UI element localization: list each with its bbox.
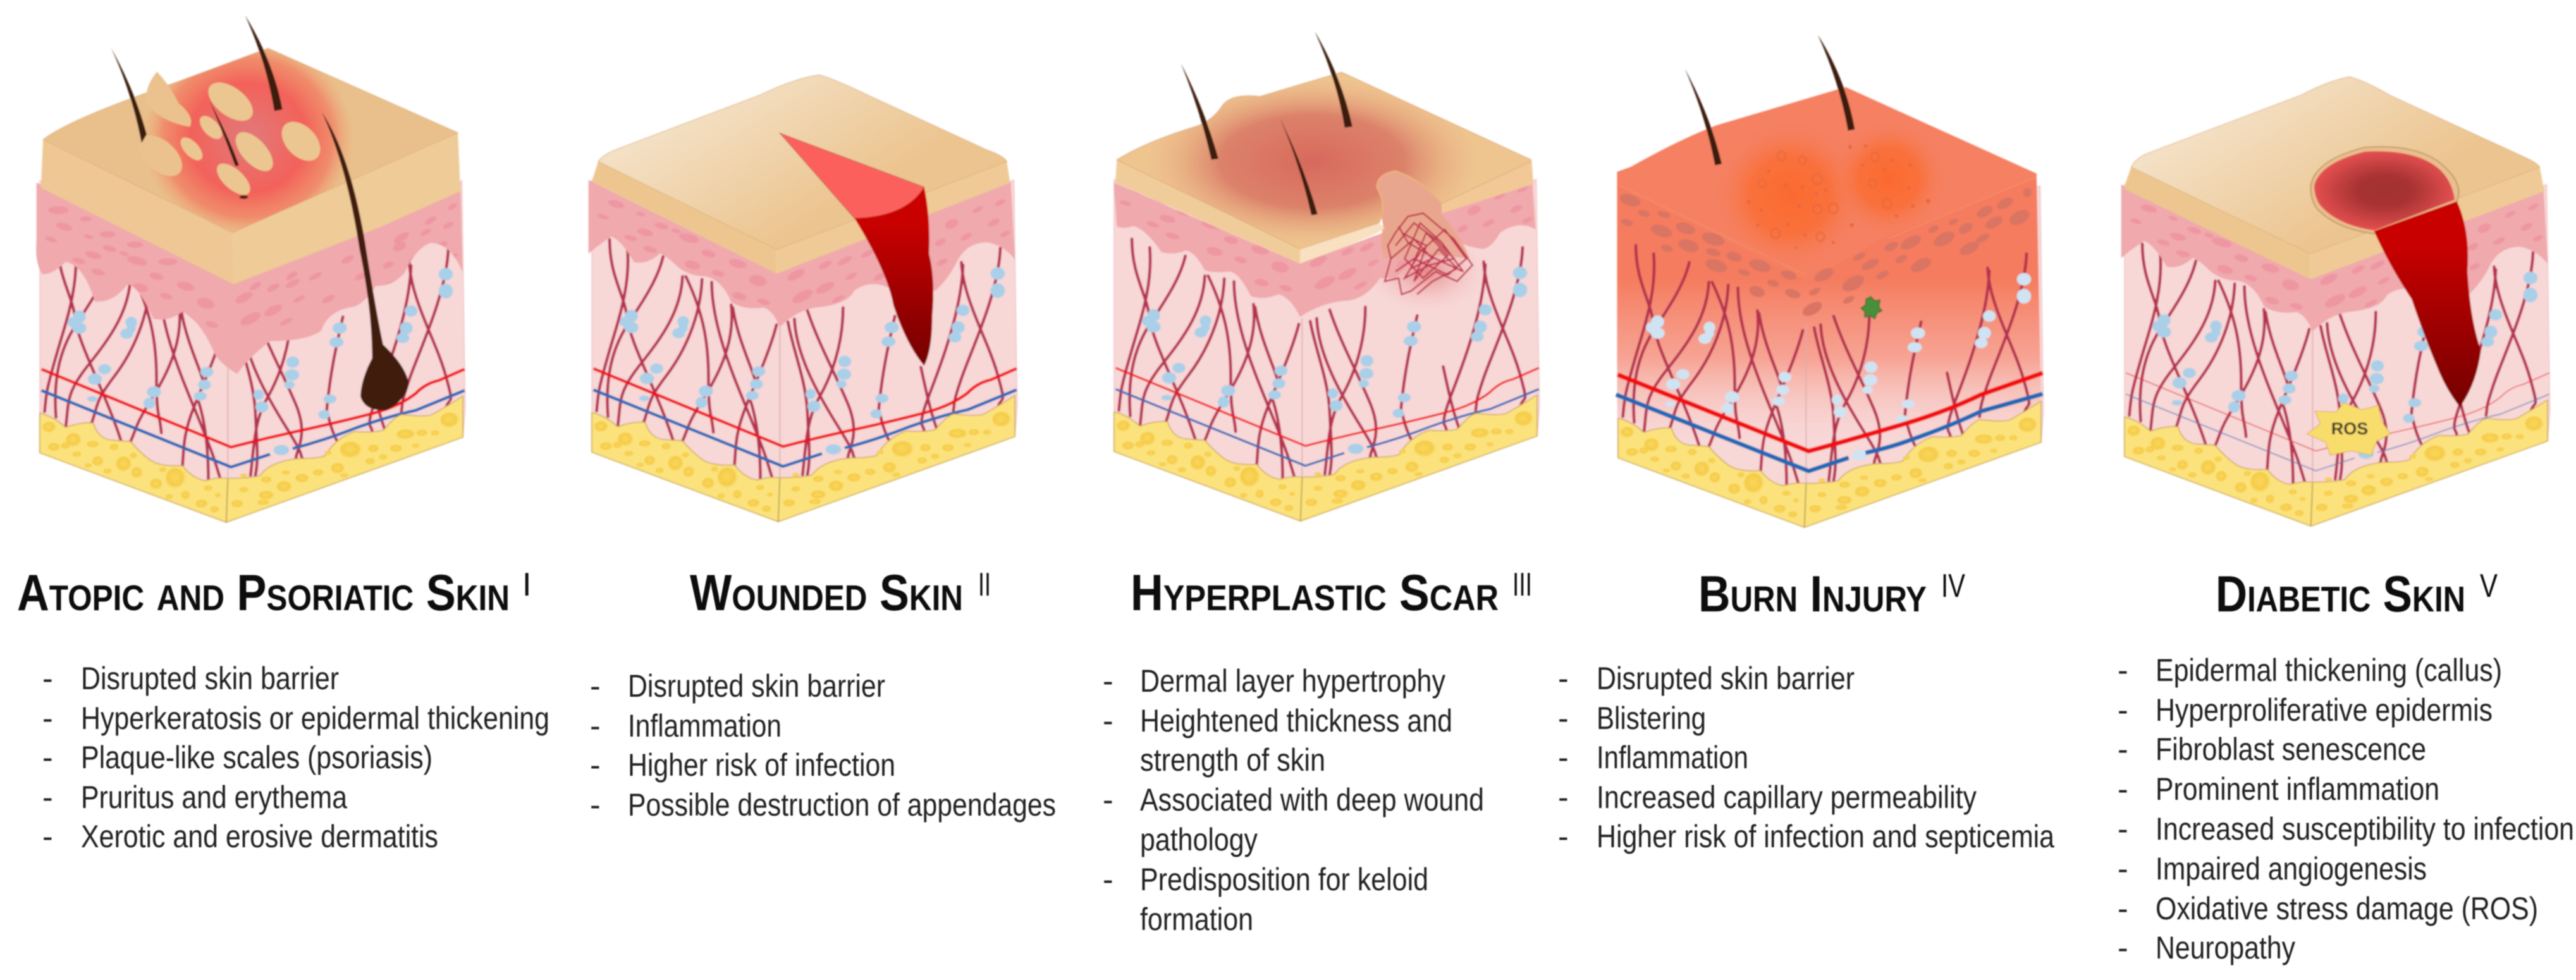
bullet list: wounded: - <box>590 708 601 744</box>
bullet list: atopic: - <box>42 701 53 736</box>
bullet list: diabetic: Hyperproliferative epidermis <box>2156 692 2493 728</box>
bullet list: diabetic: - <box>2118 930 2128 965</box>
bullet list: scar: Dermal layer hypertrophy <box>1140 663 1445 699</box>
bullet list: diabetic: Prominent inflammation <box>2156 771 2439 807</box>
panel: hyperplastic scar <box>1103 32 1540 937</box>
bullet list: atopic: - <box>42 740 53 775</box>
bullet list: wounded: - <box>590 668 601 704</box>
label: ROS: ROS <box>2331 419 2368 438</box>
bullet list: diabetic: Fibroblast senescence <box>2156 732 2426 767</box>
heading: hyperplastic scar: Hyperplastic Scar <box>1131 565 1499 622</box>
bullet list: wounded: - <box>590 787 601 823</box>
bullet list: diabetic: Neuropathy <box>2156 930 2295 965</box>
illustration: wounded skin cube <box>589 75 1017 522</box>
bullet list: diabetic: - <box>2118 692 2128 728</box>
panel: burn injury <box>1558 35 2054 854</box>
heading: hyperplastic scar: III <box>1512 567 1532 603</box>
bullet list: diabetic: - <box>2118 732 2128 767</box>
bullet list: scar <box>1103 663 1484 937</box>
bullet list: burn: Inflammation <box>1597 740 1748 775</box>
dermis base <box>1618 186 2044 527</box>
heading: diabetic skin: V <box>2480 568 2498 604</box>
bullet list: wounded <box>590 668 1056 823</box>
heading: burn injury: Burn Injury <box>1698 566 1927 623</box>
bullet list: atopic: Pruritus and erythema <box>81 780 347 815</box>
heading: diabetic skin: Diabetic Skin <box>2216 566 2465 623</box>
bullet list: diabetic: - <box>2118 771 2128 807</box>
epidermis, plaques and hair <box>36 16 463 410</box>
bullet list: burn: - <box>1558 701 1569 736</box>
bullet list: atopic: - <box>42 819 53 854</box>
heading: wounded skin: Wounded Skin <box>690 565 963 622</box>
illustration: diabetic skin cube <box>2121 77 2550 526</box>
bullet list: burn: Higher risk of infection and septicemia <box>1597 819 2054 854</box>
bullet list: diabetic <box>2118 652 2574 965</box>
epidermis and open wound <box>592 75 1010 365</box>
bullet list: burn: Increased capillary permeability <box>1597 780 1977 815</box>
vessels, hair and green pathogen <box>1616 35 2042 471</box>
bullet list: scar: - <box>1103 782 1113 818</box>
bullet list: diabetic: Impaired angiogenesis <box>2156 851 2427 886</box>
dermis layer with capillaries <box>40 181 465 522</box>
bullet list: diabetic: Epidermal thickening (callus) <box>2156 652 2502 688</box>
bullet list: diabetic: - <box>2118 811 2128 847</box>
bullet list: atopic <box>42 661 549 854</box>
bullet list: atopic: Hyperkeratosis or epidermal thickening <box>81 701 549 736</box>
epidermis, ulcer and ROS burst <box>2124 77 2544 455</box>
bullet list: atopic: Plaque-like scales (psoriasis) <box>81 740 432 775</box>
bullet list: diabetic: - <box>2118 851 2128 886</box>
capillaries and fat <box>1618 245 2041 527</box>
bullet list: scar: Predisposition for keloid <box>1140 862 1428 897</box>
bullet list: wounded: Possible destruction of appendages <box>628 787 1056 823</box>
bullet list: burn: - <box>1558 819 1569 854</box>
panel: diabetic skin <box>2118 77 2574 965</box>
bullet list: atopic: Xerotic and erosive dermatitis <box>81 819 438 854</box>
bullet list: scar: - <box>1103 862 1113 897</box>
dermis layer with capillaries <box>1114 180 1540 521</box>
dermis layer with capillaries <box>589 180 1017 522</box>
heading: burn injury: IV <box>1941 568 1965 604</box>
bullet list: burn: - <box>1558 780 1569 815</box>
bullet list: scar: Associated with deep wound <box>1140 782 1484 818</box>
bullet list: burn: Blistering <box>1597 701 1706 736</box>
bullet list: diabetic: - <box>2118 891 2128 926</box>
bullet list: scar: - <box>1103 663 1113 699</box>
bullet list: burn: Disrupted skin barrier <box>1597 661 1855 696</box>
bullet list: wounded: Higher risk of infection <box>628 747 895 783</box>
bullet list: burn <box>1558 661 2054 854</box>
heading: wounded skin: II <box>978 567 991 603</box>
bullet list: atopic: Disrupted skin barrier <box>81 661 339 696</box>
illustration: hyperplastic scar cube <box>1113 32 1540 521</box>
epidermis, redness, scar tissue and hair <box>1113 32 1536 317</box>
bullet list: scar: pathology <box>1140 822 1258 857</box>
bullet list: scar: - <box>1103 703 1113 738</box>
illustration: atopic skin cube <box>36 16 465 522</box>
bullet list: scar: formation <box>1140 902 1253 937</box>
bullet list: wounded: Inflammation <box>628 708 782 744</box>
panel: wounded skin <box>589 75 1056 823</box>
bullet list: scar: Heightened thickness and <box>1140 703 1452 738</box>
bullet list: atopic: - <box>42 780 53 815</box>
illustration: burn injury cube <box>1616 35 2044 527</box>
bullet list: atopic: - <box>42 661 53 696</box>
bullet list: diabetic: - <box>2118 652 2128 688</box>
bullet list: burn: - <box>1558 740 1569 775</box>
heading: atopic and psoriatic skin: Atopic and Psoriatic Skin <box>17 565 510 622</box>
bullet list: burn: - <box>1558 661 1569 696</box>
heading: atopic and psoriatic skin: I <box>522 567 531 603</box>
dermis layer with capillaries <box>2121 185 2550 526</box>
burn redness and blisters <box>1617 87 2042 527</box>
panel: atopic and psoriatic skin <box>17 16 549 854</box>
bullet list: wounded: Disrupted skin barrier <box>628 668 885 704</box>
bullet list: wounded: - <box>590 747 601 783</box>
bullet list: scar: strength of skin <box>1140 742 1325 778</box>
